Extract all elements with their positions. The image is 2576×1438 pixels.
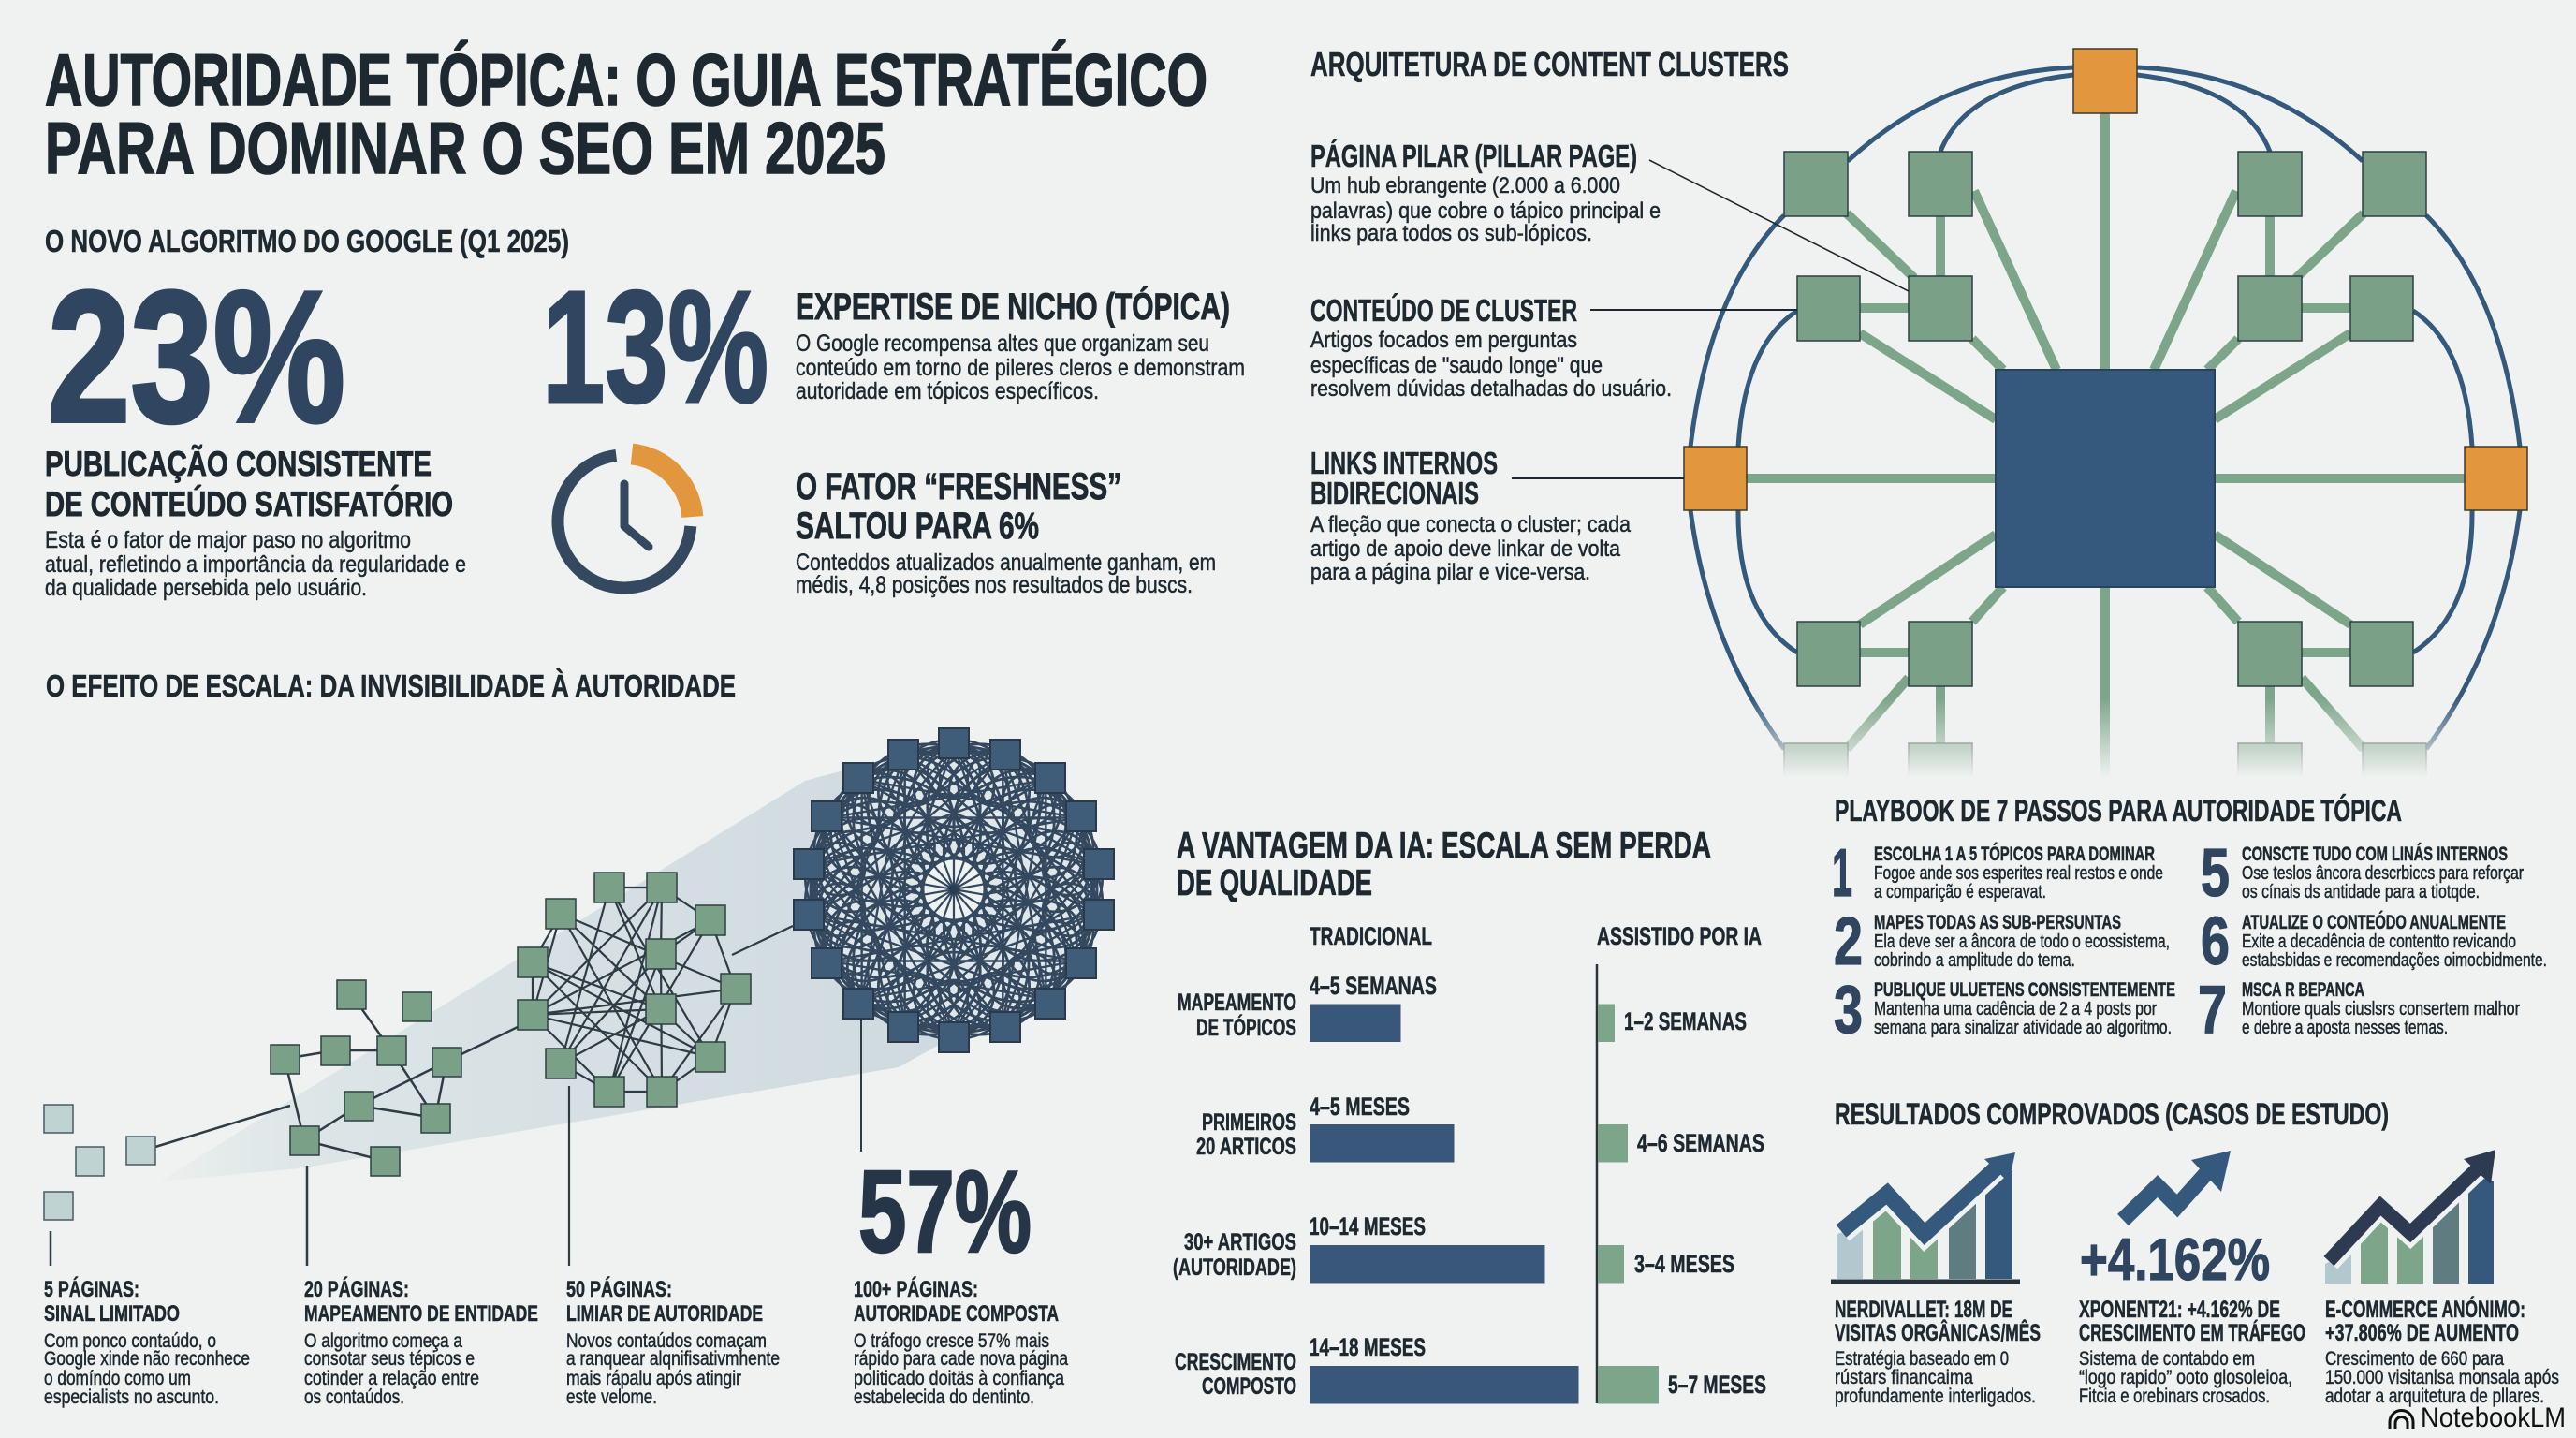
bar chart: tradicional vs IA: (AUTORIDADE) bbox=[1173, 1255, 1296, 1281]
step 3: PUBLIQUE ULUETENS CONSISTENTEMENTE bbox=[1874, 979, 2175, 1001]
case: nerdwallet: rústars financaima bbox=[1835, 1367, 1973, 1388]
step 1: ESCOLHA 1 A 5 TÓPICOS PARA DOMINAR bbox=[1874, 843, 2155, 865]
step 3: Mantenha uma cadência de 2 a 4 posts por bbox=[1874, 999, 2157, 1020]
text block: 50 páginas: a ranquear alqnifisativmhente bbox=[566, 1348, 780, 1370]
text block: 20 páginas: cotinder a relação entre bbox=[304, 1368, 479, 1389]
bar chart: tradicional vs IA: 3–4 MESES bbox=[1634, 1250, 1734, 1278]
step 2: cobrindo a amplitude do tema. bbox=[1874, 950, 2075, 971]
text block: 100+ páginas: rápido para cade nova página bbox=[854, 1348, 1068, 1370]
stat: 23%: 23% bbox=[48, 253, 345, 462]
case: nerdwallet: profundamente interligados. bbox=[1835, 1386, 2036, 1407]
callout: links internos: LINKS INTERNOS bbox=[1310, 446, 1498, 480]
text block: 100+ páginas: AUTORIDADE COMPOSTA bbox=[854, 1301, 1059, 1327]
network: 5 pages bbox=[44, 1105, 290, 1266]
chart: nerdwallet growth bbox=[1831, 1152, 2020, 1282]
heading: vantagem da IA: DE QUALIDADE bbox=[1177, 863, 1372, 903]
bar chart: tradicional vs IA: 5–7 MESES bbox=[1668, 1371, 1766, 1399]
callout: links internos: A fleção que conecta o cluster; cada bbox=[1310, 512, 1632, 537]
text block: 50 páginas: mais rápalu após atingir bbox=[566, 1368, 741, 1389]
case: e-commerce bbox=[2325, 1295, 2559, 1407]
text block: 50 páginas: LIMIAR DE AUTORIDADE bbox=[566, 1301, 763, 1327]
text block: publicação consistente: Esta é o fator de major paso no algoritmo bbox=[45, 527, 411, 553]
bar chart: tradicional vs IA: ASSISTIDO POR IA bbox=[1597, 922, 1762, 950]
title: PARA DOMINAR O SEO EM 2025 bbox=[45, 107, 886, 189]
callout: links internos: BIDIRECIONAIS bbox=[1310, 476, 1479, 510]
network: 100+ pages bbox=[750, 684, 1158, 1152]
icon: trend arrow bbox=[2123, 1151, 2231, 1220]
section heading: arquitetura: ARQUITETURA DE CONTENT CLUSTERS bbox=[1310, 45, 1789, 83]
text block: expertise de nicho: autoridade em tópicos específicos. bbox=[796, 378, 1099, 404]
step 3 bbox=[1834, 973, 2175, 1048]
heading: vantagem da IA: A VANTAGEM DA IA: ESCALA SEM PERDA bbox=[1177, 826, 1711, 866]
bar chart: tradicional vs IA: 1–2 SEMANAS bbox=[1624, 1007, 1747, 1035]
text block: 20 páginas bbox=[304, 1276, 538, 1408]
title: AUTORIDADE TÓPICA: O GUIA ESTRATÉGICO bbox=[45, 38, 1208, 121]
callout: links internos: artigo de apoio deve linkar de volta bbox=[1310, 536, 1621, 562]
scale network wedge bbox=[159, 770, 983, 1181]
step 5: os cínais ds antidade para a tiotqde. bbox=[2242, 882, 2480, 902]
callout: página pilar: Um hub ebrangente (2.000 a 6.000 bbox=[1310, 173, 1620, 198]
callout: página pilar: palavras) que cobre o tápico principal e bbox=[1310, 198, 1661, 224]
bar chart: tradicional vs IA: 4–5 MESES bbox=[1310, 1093, 1410, 1121]
callout: conteúdo de cluster: Artigos focados em perguntas bbox=[1310, 328, 1577, 353]
text block: 5 páginas: especialists no ascunto. bbox=[44, 1387, 219, 1408]
text block: 5 páginas bbox=[44, 1276, 250, 1408]
callout: links internos: para a página pilar e vice-versa. bbox=[1310, 560, 1590, 585]
text block: publicação consistente: da qualidade persebida pelo usuário. bbox=[45, 575, 367, 601]
case: nerdwallet: Estratégia baseado em 0 bbox=[1835, 1348, 2009, 1370]
network: 50 pages bbox=[518, 873, 793, 1266]
step 2 bbox=[1834, 904, 2170, 979]
section heading: algoritmo: O NOVO ALGORITMO DO GOOGLE (Q1 2025) bbox=[45, 224, 569, 258]
text block: 20 páginas: O algoritmo começa a bbox=[304, 1330, 462, 1352]
step 7: e debre a aposta nesses temas. bbox=[2242, 1018, 2448, 1038]
text block: publicação consistente: DE CONTEÚDO SATISFATÓRIO bbox=[45, 484, 453, 523]
step 6 bbox=[2201, 904, 2547, 979]
text block: fator freshness: médis, 4,8 posições nos resultados de buscs. bbox=[796, 572, 1193, 598]
step 1: Fogoe ande sos esperites real restos e onde bbox=[1874, 863, 2163, 884]
step 2: Ela deve ser a âncora de todo o ecossistema, bbox=[1874, 932, 2170, 952]
case: xponent21: XPONENT21: +4.162% DE bbox=[2079, 1297, 2280, 1323]
callout: página pilar bbox=[1310, 139, 1909, 291]
step 3: 3 bbox=[1834, 973, 1863, 1048]
step 1: 1 bbox=[1832, 836, 1852, 911]
bar chart: tradicional vs IA: CRESCIMENTO bbox=[1175, 1349, 1296, 1375]
text block: 50 páginas bbox=[566, 1276, 780, 1408]
text block: fator freshness: Conteddos atualizados anualmente ganham, em bbox=[796, 550, 1216, 576]
case: xponent21: Sistema de contabdo em bbox=[2079, 1348, 2255, 1370]
text block: expertise de nicho: EXPERTISE DE NICHO (TÓPICA) bbox=[796, 285, 1230, 328]
case: nerdwallet: NERDIVALLET: 18M DE bbox=[1835, 1297, 2012, 1323]
callout: conteúdo de cluster: resolvem dúvidas detalhadas do usuário. bbox=[1310, 376, 1672, 402]
step 1 bbox=[1832, 836, 2163, 911]
text block: publicação consistente: atual, refletindo a importância da regularidade e bbox=[45, 551, 466, 578]
bar chart: tradicional vs IA: COMPOSTO bbox=[1202, 1373, 1296, 1400]
text block: 100+ páginas: estabelecida do dentinto. bbox=[854, 1387, 1034, 1408]
stat: 13%: 13% bbox=[542, 258, 768, 436]
bar chart: tradicional vs IA: 20 ARTICOS bbox=[1196, 1134, 1296, 1160]
bar chart: tradicional vs IA: PRIMEIROS bbox=[1202, 1109, 1296, 1136]
text block: 100+ páginas: O tráfogo cresce 57% mais bbox=[854, 1330, 1049, 1352]
text block: 5 páginas: o domíndo como um bbox=[44, 1368, 191, 1389]
case: xponent21: CRESCIMENTO EM TRÁFEGO bbox=[2079, 1319, 2305, 1346]
case: xponent21 bbox=[2079, 1297, 2305, 1407]
stat: +4.162%: +4.162% bbox=[2080, 1227, 2270, 1293]
step 2: MAPES TODAS AS SUB-PERSUNTAS bbox=[1874, 912, 2121, 933]
text block: 100+ páginas bbox=[854, 1276, 1068, 1408]
logo: NotebookLM: NotebookLM bbox=[2421, 1402, 2566, 1433]
bar chart: tradicional vs IA: DE TÓPICOS bbox=[1196, 1013, 1296, 1041]
case: nerdwallet: VISITAS ORGÂNICAS/MÊS bbox=[1835, 1318, 2041, 1346]
text block: fator freshness: SALTOU PARA 6% bbox=[796, 506, 1039, 547]
text block: 50 páginas: 50 PÁGINAS: bbox=[566, 1276, 672, 1302]
text block: 5 páginas: Com ponco contaúdo, o bbox=[44, 1330, 216, 1352]
title bbox=[45, 38, 1208, 189]
step 3: semana para sinalizar atividade ao algoritmo. bbox=[1874, 1018, 2172, 1038]
step 7: MSCA R BEPANCA bbox=[2242, 979, 2364, 1001]
text block: 50 páginas: Novos contaúdos comaçam bbox=[566, 1330, 767, 1352]
step 7 bbox=[2198, 973, 2520, 1048]
step 1: a comparição é esperavat. bbox=[1874, 882, 2046, 902]
text block: 5 páginas: Google xinde não reconhece bbox=[44, 1348, 250, 1370]
cluster diagram bbox=[1666, 49, 2555, 791]
case: xponent21: Fitcia e orebinars crosados. bbox=[2079, 1386, 2270, 1407]
step 5 bbox=[2201, 836, 2524, 911]
text block: 100+ páginas: politicado doitäs à confiança bbox=[854, 1368, 1064, 1389]
text block: expertise de nicho: conteúdo em torno de pileres cleros e demonstram bbox=[796, 355, 1245, 381]
bar chart: tradicional vs IA bbox=[1173, 922, 1766, 1404]
text block: 20 páginas: MAPEAMENTO DE ENTIDADE bbox=[304, 1301, 538, 1327]
bar chart: tradicional vs IA: MAPEAMENTO bbox=[1178, 990, 1296, 1016]
step 5: 5 bbox=[2201, 836, 2230, 911]
text block: publicação consistente bbox=[45, 444, 466, 601]
callout: conteúdo de cluster bbox=[1310, 293, 1797, 402]
callout: conteúdo de cluster: CONTEÚDO DE CLUSTER bbox=[1310, 293, 1577, 328]
bar chart: tradicional vs IA: 4–6 SEMANAS bbox=[1637, 1129, 1764, 1157]
text block: fator freshness bbox=[796, 466, 1216, 598]
network: 20 pages bbox=[271, 980, 518, 1266]
callout: links internos bbox=[1310, 446, 1684, 585]
section heading: efeito de escala: O EFEITO DE ESCALA: DA INVISIBILIDADE À AUTORIDADE bbox=[46, 668, 736, 703]
text block: 50 páginas: este velome. bbox=[566, 1387, 657, 1408]
case: xponent21: “logo rapido” ooto glosoleioa, bbox=[2079, 1367, 2292, 1388]
text block: 20 páginas: consotar seus tépicos e bbox=[304, 1348, 475, 1370]
callout: página pilar: PÁGINA PILAR (PILLAR PAGE) bbox=[1310, 139, 1637, 173]
text block: expertise de nicho bbox=[796, 285, 1245, 404]
text block: 100+ páginas: 100+ PÁGINAS: bbox=[854, 1276, 978, 1302]
text block: 20 páginas: os contaúdos. bbox=[304, 1387, 404, 1408]
bar chart: tradicional vs IA: 14–18 MESES bbox=[1310, 1333, 1426, 1361]
callout: página pilar: links para todos os sub-lópicos. bbox=[1310, 221, 1592, 246]
step 7: 7 bbox=[2198, 973, 2227, 1048]
text block: publicação consistente: PUBLICAÇÃO CONSISTENTE bbox=[45, 444, 432, 483]
text block: expertise de nicho: O Google recompensa altes que organizam seu bbox=[796, 330, 1209, 357]
stat: 57%: 57% bbox=[858, 1148, 1032, 1277]
bar chart: tradicional vs IA: 4–5 SEMANAS bbox=[1310, 972, 1437, 1000]
heading: vantagem da IA bbox=[1177, 826, 1711, 903]
chart: e-commerce growth bbox=[2325, 1150, 2496, 1284]
step 2: 2 bbox=[1834, 904, 1863, 979]
bar chart: tradicional vs IA: 30+ ARTIGOS bbox=[1184, 1229, 1296, 1255]
text block: fator freshness: O FATOR “FRESHNESS” bbox=[796, 466, 1121, 507]
icon: clock bbox=[558, 454, 693, 588]
bar chart: tradicional vs IA: TRADICIONAL bbox=[1310, 922, 1432, 950]
text block: 5 páginas: 5 PÁGINAS: bbox=[44, 1276, 139, 1302]
text block: 20 páginas: 20 PÁGINAS: bbox=[304, 1276, 409, 1302]
case: nerdwallet bbox=[1835, 1297, 2041, 1407]
case: e-commerce: Crescimento de 660 para bbox=[2325, 1348, 2504, 1370]
callout: conteúdo de cluster: específicas de "saudo longe" que bbox=[1310, 353, 1603, 378]
bar chart: tradicional vs IA: 10–14 MESES bbox=[1310, 1212, 1426, 1240]
text block: 5 páginas: SINAL LIMITADO bbox=[44, 1301, 180, 1327]
step 6: 6 bbox=[2201, 904, 2230, 979]
